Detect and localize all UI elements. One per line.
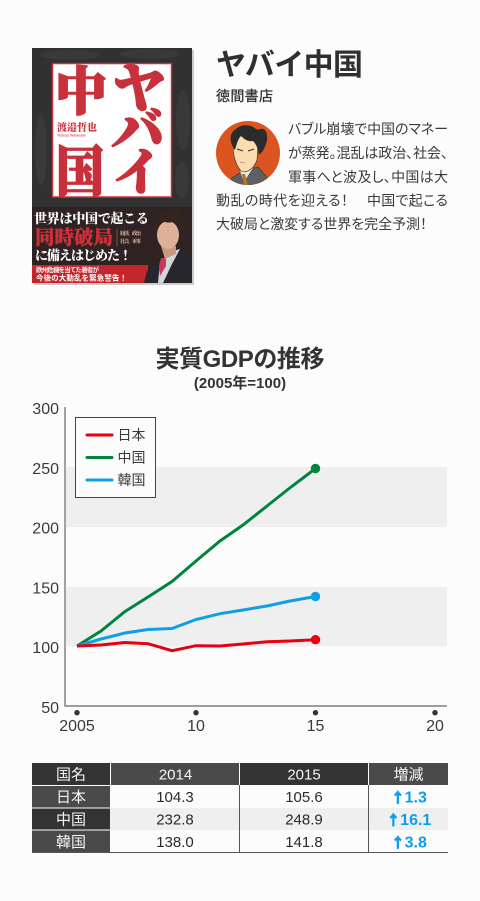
book author photo <box>144 222 192 283</box>
table row: China <box>32 808 448 830</box>
x axis labels: 10 <box>187 718 205 735</box>
book lower band <box>32 207 192 283</box>
x axis labels: 15 <box>307 718 324 735</box>
y axis labels: 100 <box>32 640 59 657</box>
book lower band: 今後の大動乱を緊急警告！ <box>36 272 127 282</box>
description text: 動乱の時代を迎える！ <box>216 192 348 208</box>
y axis labels: 200 <box>32 520 59 538</box>
book title panel: 渡邉哲也 <box>57 121 97 134</box>
icon: author avatar <box>216 121 280 186</box>
legend <box>76 418 156 498</box>
table header: 国名 <box>56 766 86 784</box>
book title panel: 国 <box>56 143 104 204</box>
book cover <box>32 48 194 285</box>
book title panel: ヤ <box>112 59 166 119</box>
description text: 軍事へと波及し、中国は大 <box>288 169 448 185</box>
line: Japan <box>77 635 320 651</box>
description text: が蒸発。混乱は政治、社会、 <box>288 145 448 161</box>
book lower band: 同時破局 <box>35 227 113 249</box>
book lower band: 経済、政治 <box>120 230 142 237</box>
publisher: 徳間書店 <box>216 88 273 104</box>
book title panel <box>52 59 172 204</box>
book lower band: 社会、軍事 <box>120 238 141 245</box>
x axis labels: 2005 <box>59 718 95 735</box>
y axis labels: 150 <box>32 580 59 598</box>
table row: Korea: 141.8 <box>285 834 323 851</box>
table row: Japan: ↑1.3 <box>391 786 427 806</box>
book title panel: 中 <box>55 64 107 122</box>
table row: China: 232.8 <box>156 812 194 828</box>
description text: 中国で起こる <box>367 192 448 208</box>
table row: Japan: 104.3 <box>156 789 194 806</box>
y axis labels <box>32 401 59 717</box>
x axis labels: 20 <box>426 718 444 735</box>
table row: Korea <box>32 830 427 852</box>
table row: Korea: 韓国 <box>56 834 86 851</box>
table row: Japan: 105.6 <box>285 789 323 806</box>
x axis labels <box>59 710 444 735</box>
table header: 2014 <box>159 766 192 784</box>
y axis labels: 300 <box>32 401 59 418</box>
book title panel: イ <box>113 145 163 201</box>
book title panel: バ <box>112 104 164 161</box>
description text: 大破局と激変する世界を完全予測！ <box>216 216 427 232</box>
chart heading: 実質GDPの推移 <box>156 346 324 373</box>
book title panel: Tetsuya Watanabe <box>57 134 86 138</box>
table row: China: ↑16.1 <box>387 809 431 829</box>
y axis labels: 250 <box>32 461 59 478</box>
table row: Korea: ↑3.8 <box>391 832 427 852</box>
line chart <box>32 401 447 735</box>
table row: Japan: 日本 <box>56 789 86 806</box>
data table <box>32 763 448 852</box>
title: ヤバイ中国 <box>216 49 363 82</box>
chart subheading: (2005年=100) <box>194 374 286 392</box>
legend: 中国 <box>118 450 146 466</box>
legend: 日本 <box>118 427 146 443</box>
table row: China: 中国 <box>56 812 86 828</box>
table row: China: 248.9 <box>285 812 323 828</box>
book lower band: に備えはじめた！ <box>35 248 132 263</box>
book lower band: 世界は中国で起こる <box>34 211 149 226</box>
y axis labels: 50 <box>41 700 59 717</box>
line: China <box>77 464 320 646</box>
legend: 韓国 <box>118 472 146 488</box>
table header: 2015 <box>287 766 321 784</box>
table row: Korea: 138.0 <box>156 834 194 851</box>
line: Korea <box>77 592 320 646</box>
description text: バブル崩壊で中国のマネー <box>288 121 448 137</box>
book lower band: 欧州危機を当てた著者が <box>36 265 100 274</box>
table header: 増減 <box>393 766 424 784</box>
table row: Japan <box>32 786 427 808</box>
description text <box>216 121 448 232</box>
table header <box>32 763 448 785</box>
